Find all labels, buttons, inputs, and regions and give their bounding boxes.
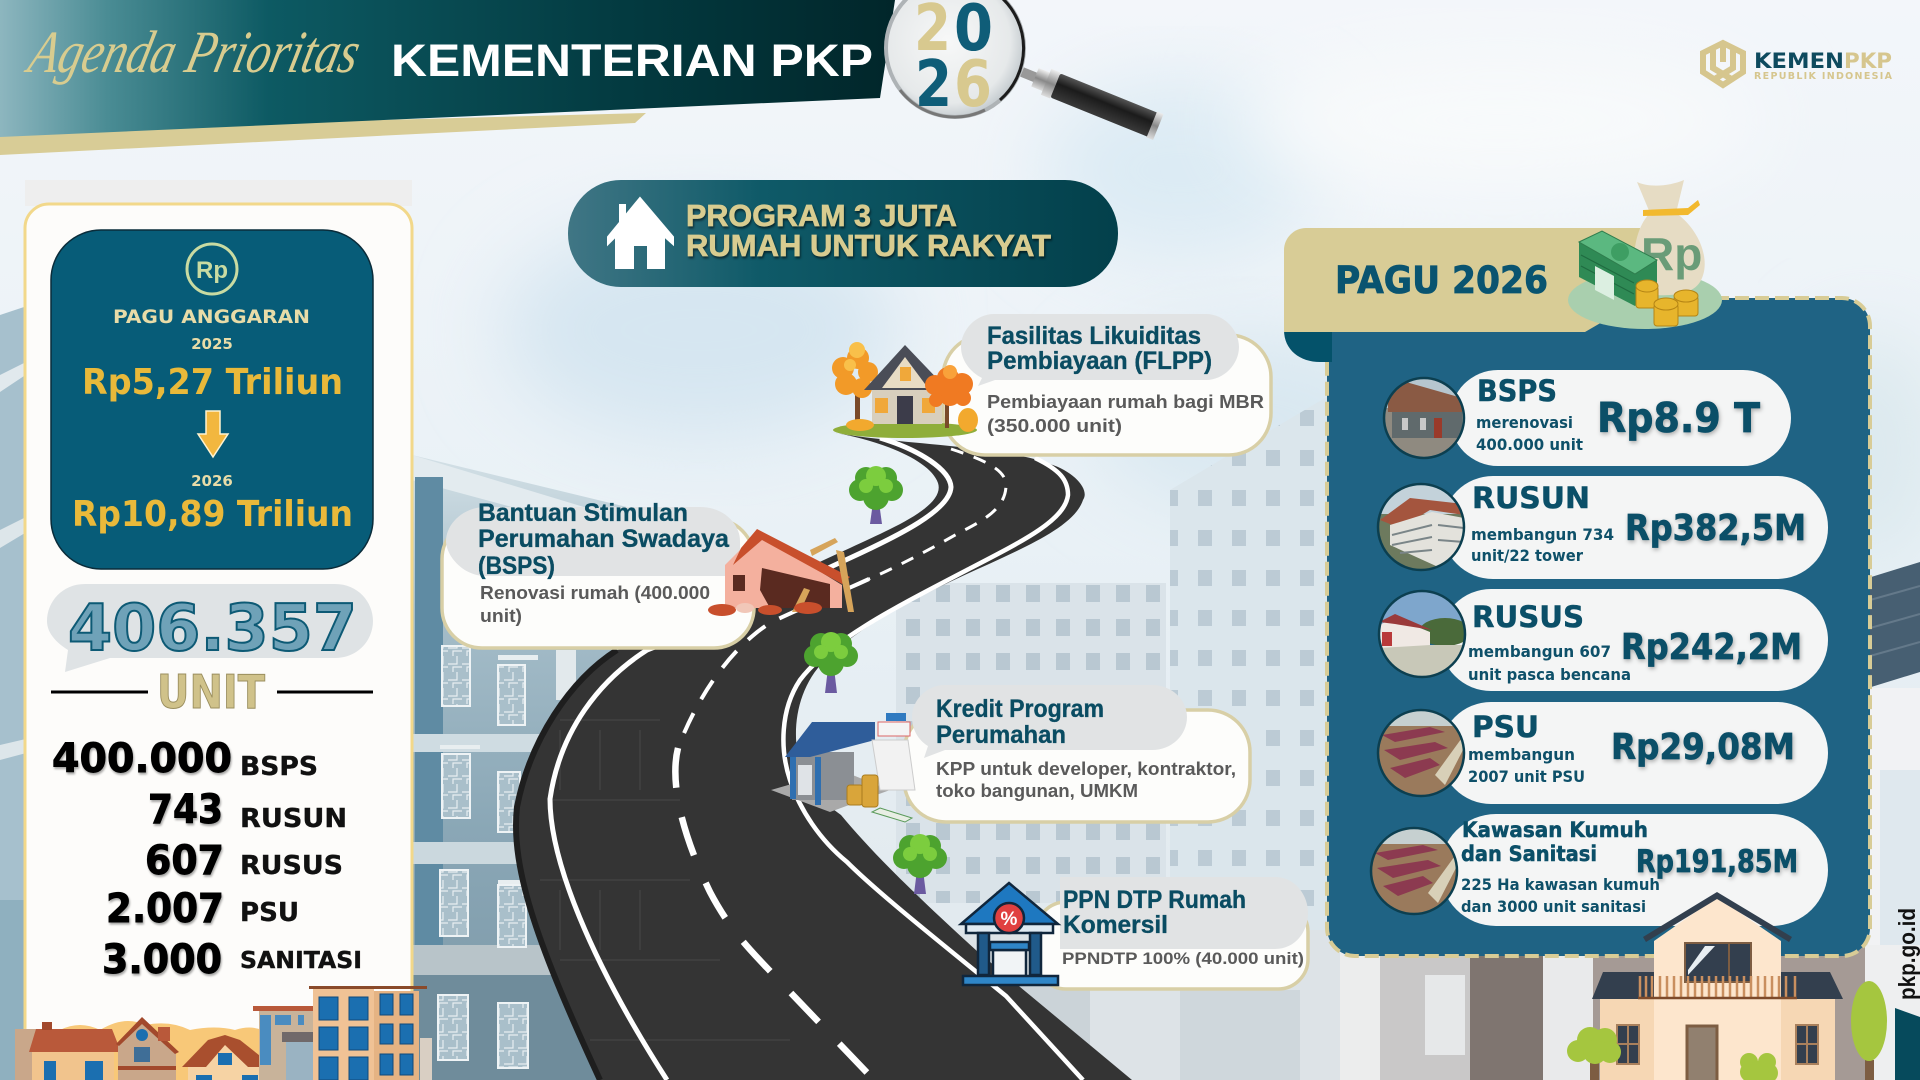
RUSUS description: unit pasca bencana [1468,665,1631,684]
unit breakdown list: 2.007 [106,886,224,932]
logo KemenPKP: PKP [1844,49,1892,73]
callout: Kredit Program Perumahan [904,685,1250,822]
unit heading: UNIT [157,665,266,719]
icon: house with autumn trees [832,342,978,438]
header: teal banner shape [0,0,895,137]
Kredit description: toko bangunan, UMKM [936,781,1138,801]
total bubble: 406.357 [68,592,357,666]
icon: Rp coin [187,244,237,294]
magnifier: handle [1017,59,1164,140]
arrow down [198,411,228,457]
magnifier: year digits: 2 [915,48,952,122]
RUSUS description: membangun 607 [1468,642,1611,661]
Pagu: gold banner [1284,228,1640,332]
budget 2025 value: Rp5,27 Triliun [82,362,343,403]
row: PSU [1378,702,1828,804]
unit breakdown list: 400.000 [52,736,232,782]
icon: bank building with percent [961,883,1058,985]
RUSUN title: RUSUN [1472,481,1590,515]
magnifier: lens [886,0,1024,117]
FLPP description [987,392,1264,436]
Kredit heading tab [912,685,1187,758]
RUSUS pill [1440,589,1828,691]
icon: bank building with percent: % [1001,909,1018,930]
header banner [0,0,895,155]
BSPS description: Renovasi rumah (400.000 [480,583,710,603]
program title text: PROGRAM 3 JUTA [686,198,957,233]
Kredit description: KPP untuk developer, kontraktor, [936,759,1236,779]
road [516,432,1132,1080]
BSPS title: BSPS [1477,374,1557,408]
logo wordmark: KEMEN [1754,49,1844,73]
Pagu: ribbon curl [1284,330,1332,362]
BSPS description: merenovasi [1476,413,1573,432]
RUSUS description [1468,642,1631,684]
website label: pkp.go.id [1894,908,1920,1000]
road: left white edge line [550,438,951,1080]
FLPP heading tab [961,314,1239,386]
icon: money bag, bills and coins [1568,180,1722,329]
house window [1685,943,1751,982]
icon: white house [608,198,673,268]
PSU photo [1378,710,1464,796]
BSPS heading tab [446,507,740,576]
left bush [1567,1027,1621,1080]
BSPS photo [1384,378,1464,458]
Kawasan title: Kawasan Kumuh [1462,818,1648,842]
RUSUN pill [1442,476,1828,579]
unit breakdown list: RUSUS [240,851,343,881]
mid-rise tower [253,1006,314,1080]
PPN heading: PPN DTP Rumah [1063,886,1246,914]
unit breakdown list: PSU [240,898,299,928]
logo KemenPKP [1703,43,1893,85]
BSPS body card [442,519,754,648]
RUSUS amount: Rp242,2M [1621,627,1802,668]
row: BSPS [1384,370,1791,466]
callout: FLPP [943,314,1271,455]
header: script title: Agenda Prioritas [19,20,367,86]
illustration: city skyline [15,986,432,1080]
PPN body card [1036,902,1308,989]
BSPS description [1476,413,1583,454]
icon: money bag, bills and coins: Rp [1641,228,1702,280]
Kredit heading [936,695,1104,749]
RUSUN description: unit/22 tower [1471,546,1583,565]
Kawasan description [1461,875,1660,916]
magnifier: year digits [914,0,993,122]
Kawasan amount: Rp191,85M [1636,844,1798,880]
illustration: two-storey house [1567,892,1887,1080]
budget card [51,230,373,569]
PSU title: PSU [1472,710,1539,744]
house balcony [1638,976,1797,998]
PSU amount: Rp29,08M [1611,727,1795,768]
year 2026: 2026 [191,472,233,490]
program title text: RUMAH UNTUK RAKYAT [686,228,1051,263]
gabled house blue window [116,1017,179,1080]
budget 2026 value: Rp10,89 Triliun [72,494,353,535]
program title text [686,198,1051,263]
FLPP heading [987,322,1212,375]
Kredit body card [904,710,1250,822]
road: right white edge line [783,458,1083,1080]
icon: damaged house [708,529,854,616]
FLPP heading: Pembiayaan (FLPP) [987,347,1212,375]
unit breakdown list: 743 [148,787,223,833]
PSU description: membangun [1468,745,1575,764]
background: left apartment building [412,455,660,1080]
left panel card [25,204,412,1080]
Kawasan title: dan Sanitasi [1461,842,1597,866]
program pill [568,180,1118,287]
BSPS amount: Rp8.9 T [1597,394,1760,442]
header: main title: KEMENTERIAN PKP [391,35,873,86]
row: RUSUS [1379,589,1828,691]
PPN heading tab [1060,877,1308,949]
magnifier with 2026 [886,0,1164,140]
Kawasan description: 225 Ha kawasan kumuh [1461,875,1660,894]
BSPS pill [1450,370,1791,466]
RUSUN amount: Rp382,5M [1625,508,1806,549]
year 2025: 2025 [191,335,233,353]
row: Kawasan Kumuh dan Sanitasi [1371,814,1828,926]
cream house [182,1035,285,1080]
icon: Rp coin: Rp [196,257,228,284]
Kawasan description: dan 3000 unit sanitasi [1461,897,1646,916]
RUSUN photo [1378,484,1464,574]
background: right house wall and roof [1340,562,1920,1080]
background: left edge building strip [0,305,30,1080]
Kawasan photo [1371,828,1457,914]
PPN heading: Komersil [1063,911,1168,939]
BSPS heading: (BSPS) [478,552,555,580]
RUSUS title: RUSUS [1472,600,1584,634]
BSPS description [480,583,710,626]
PPN heading [1063,886,1246,939]
unit breakdown list: BSPS [240,752,318,782]
background: faded city buildings [880,395,1340,1080]
FLPP heading: Fasilitas Likuiditas [987,322,1201,350]
PSU pill [1440,702,1828,804]
road: centre dashes [675,449,1006,1080]
RUSUS photo [1380,592,1464,676]
callout: PPN DTP [1036,877,1308,989]
Pagu: heading: PAGU 2026 [1335,259,1548,302]
logo icon [1703,43,1743,85]
house side windows [1617,1025,1818,1064]
Kredit heading: Kredit Program [936,695,1104,723]
Kawasan title [1461,818,1648,866]
tree 1 [849,466,903,524]
BSPS heading: Perumahan Swadaya [478,525,730,553]
unit breakdown list: 3.000 [102,937,222,983]
FLPP description: (350.000 unit) [987,416,1122,436]
magnifier: year digits: 6 [954,48,992,122]
BSPS heading: Bantuan Stimulan [478,499,688,527]
Kredit description [936,759,1236,801]
RUSUN description [1471,525,1614,565]
left panel: budget and units [25,180,412,1080]
right tree [1851,981,1887,1080]
FLPP description: Pembiayaan rumah bagi MBR [987,392,1264,412]
header: gold underline band [0,113,646,155]
Pagu: blue panel with dashed border [1327,298,1870,956]
unit breakdown list: 607 [145,838,224,884]
callout: BSPS [442,499,754,648]
BSPS description: unit) [480,606,522,626]
unit breakdown list [52,736,362,983]
centre bush [1740,1053,1778,1080]
tall apartment [309,986,432,1080]
Kredit heading: Perumahan [936,721,1066,749]
RUSUN description: membangun 734 [1471,525,1614,544]
brick house [15,1022,121,1080]
FLPP body card [943,335,1271,455]
Kawasan pill [1440,814,1828,926]
PSU description: 2007 unit PSU [1468,767,1585,786]
panel: Pagu 2026 [1284,180,1870,956]
corner accent [1895,1008,1920,1080]
BSPS description: 400.000 unit [1476,435,1583,454]
unit breakdown list: SANITASI [240,948,362,974]
logo subtitle: REPUBLIK INDONESIA [1754,71,1893,82]
BSPS heading [478,499,730,580]
PSU description [1468,745,1585,786]
tree 2 [804,632,858,693]
house door [1687,1026,1717,1080]
icon: house with documents and coins [771,713,915,822]
budget heading: PAGU ANGGARAN [113,306,310,328]
unit breakdown list: RUSUN [240,804,347,834]
tree 3 [893,834,947,894]
PPN description: PPNDTP 100% (40.000 unit) [1062,949,1304,968]
row: RUSUN [1378,476,1828,579]
